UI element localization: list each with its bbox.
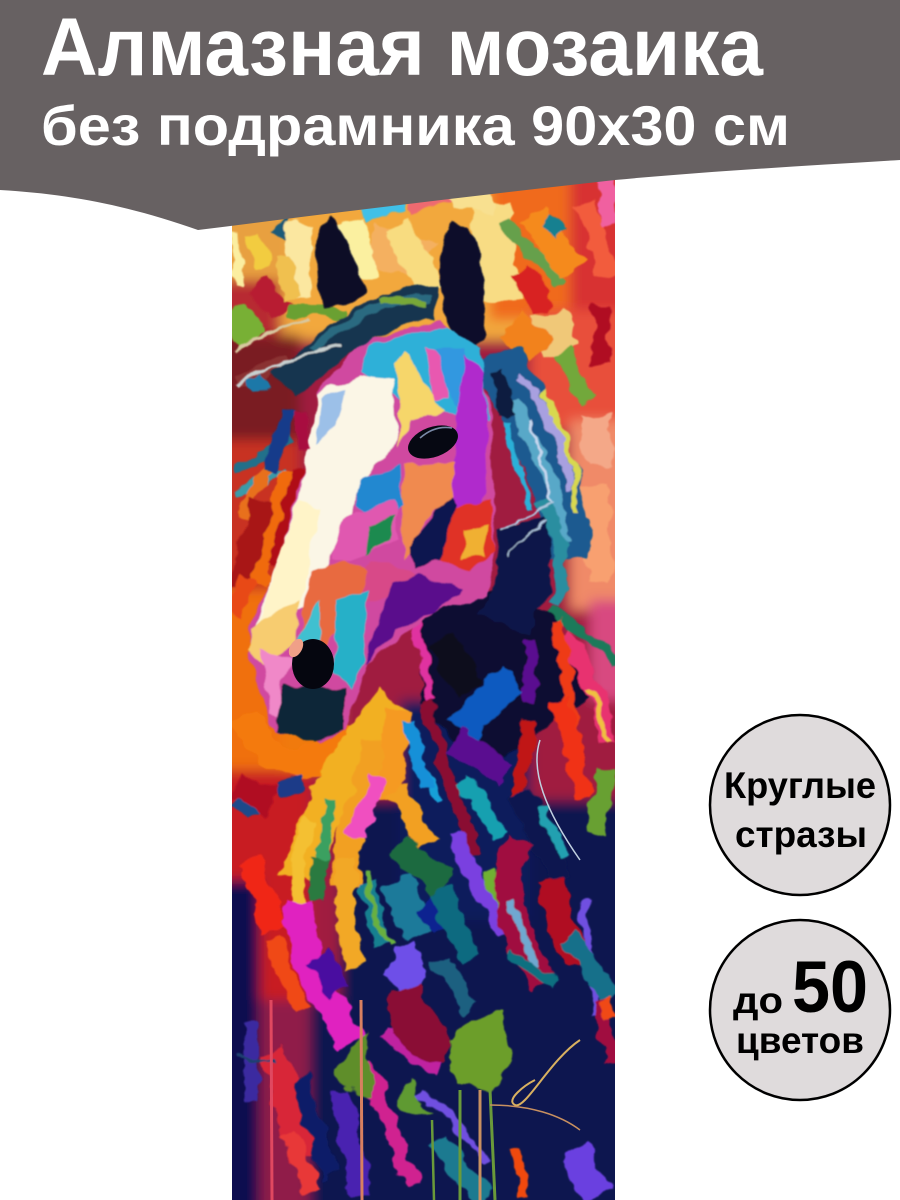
badge: up to 50 colours: цветов — [736, 1020, 864, 1061]
badge: round rhinestones: стразы — [735, 814, 867, 855]
badge: up to 50 colours: 50 — [792, 947, 868, 1028]
badge: up to 50 colours — [710, 920, 890, 1100]
subtitle: без подрамника 90x30 см — [41, 94, 790, 157]
painting background — [232, 180, 615, 1200]
title: Алмазная мозаика — [41, 2, 764, 93]
painting: colourful horse — [232, 180, 615, 1200]
horse ears — [315, 217, 486, 357]
horse forelock — [235, 299, 437, 470]
badge: round rhinestones — [710, 715, 890, 895]
horse eye and nostril — [286, 419, 463, 689]
paint drips — [271, 740, 580, 1200]
badge: round rhinestones: Круглые — [724, 765, 876, 806]
paint strokes background — [232, 180, 610, 1190]
header banner — [0, 0, 900, 230]
badge: up to 50 colours: до — [733, 980, 783, 1021]
horse head — [248, 320, 495, 742]
horse mane and neck — [298, 355, 615, 1198]
